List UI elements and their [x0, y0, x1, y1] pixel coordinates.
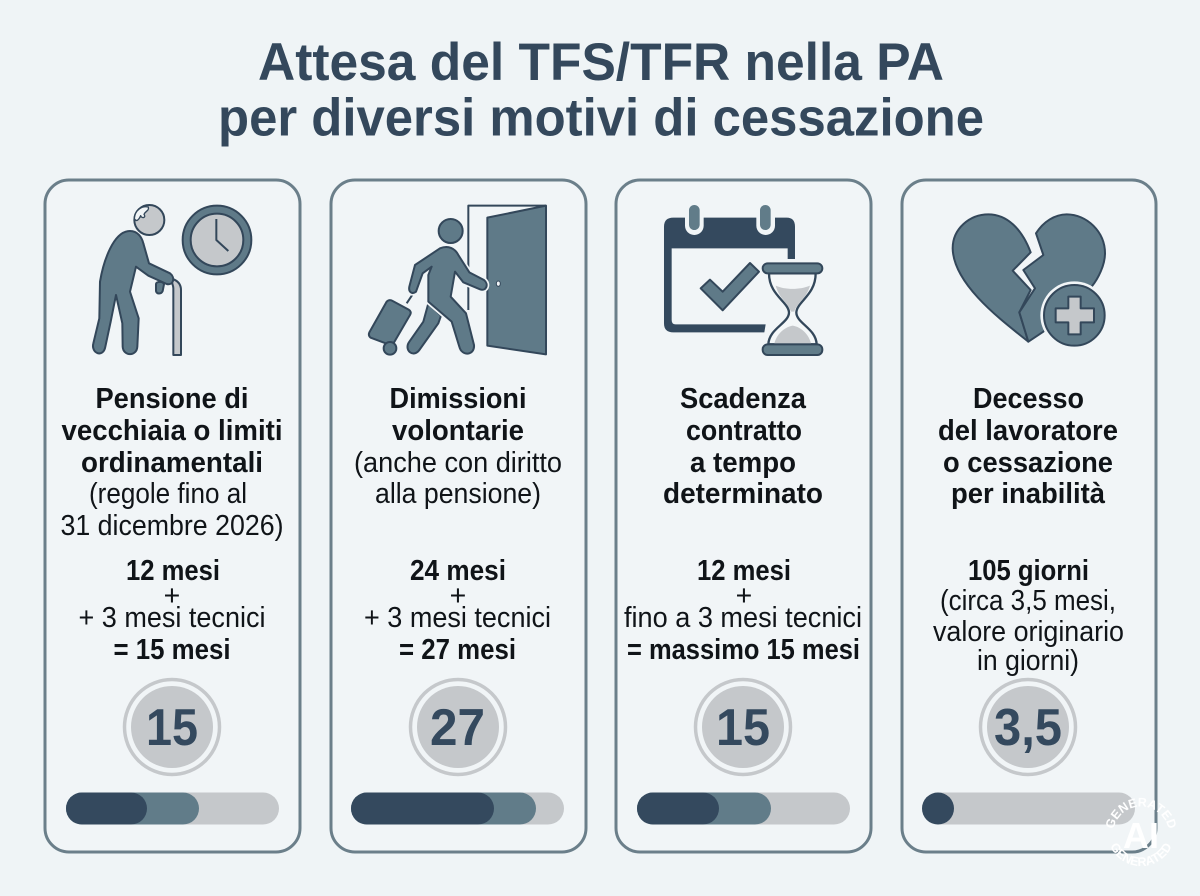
watermark: AI generated badge: AI: [1123, 815, 1159, 856]
heading: pensione: Pensione di: [96, 383, 248, 415]
heading: scadenza: [663, 383, 823, 510]
heading: scadenza: Scadenza: [680, 383, 807, 415]
icon: broken heart with medical cross: [953, 214, 1108, 349]
badge: 15 months maximum: 15: [716, 699, 770, 757]
heading: decesso: Decesso: [973, 383, 1084, 415]
calculation: dimissioni: = 27 mesi: [399, 634, 516, 666]
calculation: scadenza: = massimo 15 mesi: [627, 634, 860, 666]
progress bar: 27 months: [351, 792, 564, 824]
heading: dimissioni: volontarie: [392, 415, 524, 447]
heading: decesso: [938, 383, 1118, 510]
calculation: decesso: in giorni): [977, 645, 1079, 677]
heading: dimissioni: [354, 383, 562, 510]
calculation: decesso: 105 giorni: [968, 555, 1089, 587]
heading: decesso: per inabilità: [951, 478, 1105, 510]
heading: pensione: vecchiaia o limiti: [62, 415, 282, 447]
calculation: dimissioni: [364, 555, 551, 666]
progress bar: 15 months maximum: [637, 792, 850, 824]
badge: 15 months maximum: [696, 680, 790, 774]
badge: 27 months: 27: [430, 699, 485, 757]
calculation: decesso: valore originario: [933, 616, 1124, 648]
calculation: decesso: [933, 555, 1124, 677]
heading: scadenza: a tempo: [690, 447, 796, 479]
heading: scadenza: determinato: [663, 478, 823, 510]
badge: 3,5 months: [980, 680, 1076, 774]
calculation: pensione: 12 mesi: [126, 555, 220, 587]
heading: scadenza: contratto: [686, 415, 802, 447]
badge: 15 months: 15: [146, 699, 198, 757]
heading: dimissioni: alla pensione): [375, 478, 541, 510]
calculation: scadenza: fino a 3 mesi tecnici: [624, 602, 862, 634]
progress bar: 15 months: [66, 792, 279, 824]
heading: pensione: (regole fino al: [89, 478, 247, 510]
heading: pensione: 31 dicembre 2026): [60, 510, 284, 542]
watermark: AI generated badge: GENERATED: [1112, 844, 1170, 866]
badge: 27 months: [410, 680, 506, 774]
badge: 15 months: [124, 680, 220, 774]
heading: decesso: o cessazione: [943, 447, 1113, 479]
calculation: pensione: = 15 mesi: [114, 634, 230, 666]
icon: calendar with check mark and hourglass: [664, 202, 822, 355]
progress bar: 3,5 months: [922, 792, 1135, 824]
panel: pensione di vecchiaia: [45, 180, 300, 852]
title: per diversi motivi di cessazione: [218, 88, 984, 148]
heading: decesso: del lavoratore: [938, 415, 1118, 447]
icon: person with suitcase leaving through a door: [369, 206, 546, 355]
panel: dimissioni volontarie: [331, 180, 586, 852]
calculation: dimissioni: 24 mesi: [410, 555, 506, 587]
watermark: AI generated badge: GENERATED: [1106, 798, 1176, 828]
calculation: decesso: (circa 3,5 mesi,: [940, 585, 1116, 617]
title: Attesa del TFS/TFR nella PA: [258, 33, 944, 92]
heading: dimissioni: (anche con diritto: [354, 447, 562, 479]
calculation: scadenza: +: [736, 580, 752, 612]
heading: dimissioni: Dimissioni: [390, 383, 526, 415]
title: [218, 33, 984, 148]
calculation: pensione: [78, 555, 266, 666]
heading: pensione: ordinamentali: [81, 447, 263, 479]
calculation: dimissioni: + 3 mesi tecnici: [364, 602, 551, 634]
badge: 3,5 months: 3,5: [994, 699, 1062, 757]
watermark: AI generated badge: [1106, 798, 1176, 866]
calculation: scadenza: [624, 555, 862, 666]
icon: elderly person with cane and clock: [93, 205, 251, 355]
heading: pensione: [60, 383, 284, 542]
panel: scadenza contratto: [616, 180, 871, 852]
calculation: pensione: +: [164, 580, 180, 612]
calculation: dimissioni: +: [450, 580, 466, 612]
calculation: scadenza: 12 mesi: [697, 555, 791, 587]
calculation: pensione: + 3 mesi tecnici: [78, 602, 266, 634]
panel: decesso o inabilità: [902, 180, 1156, 852]
